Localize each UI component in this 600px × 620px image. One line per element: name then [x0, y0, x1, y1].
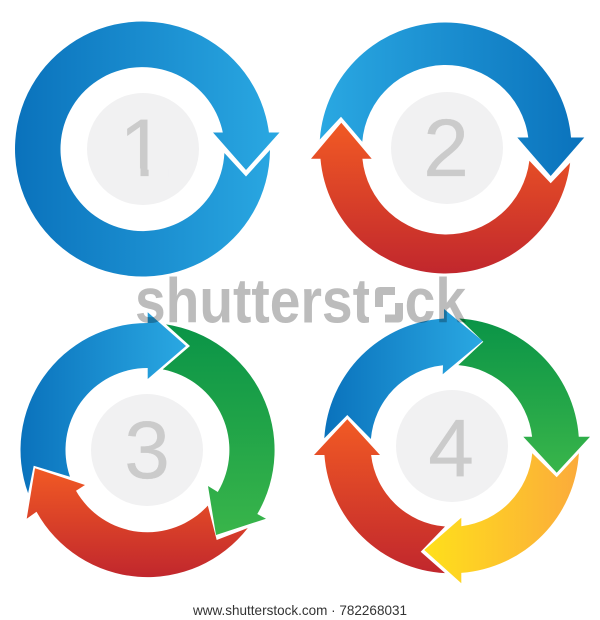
diagram 1: single-arrow cycle — [15, 22, 279, 277]
center badge 4 — [396, 390, 508, 502]
footer image id: www.shutterstock.com · 782268031 — [192, 602, 407, 618]
center badge 2: 2 — [423, 103, 469, 194]
center badge 2 — [391, 92, 503, 204]
arrow: blue top-left — [324, 309, 483, 439]
arrow: blue top — [320, 22, 584, 176]
arrow: green top-right — [458, 319, 590, 473]
arrow: red bottom-left — [314, 419, 445, 573]
center badge 4: 4 — [428, 403, 474, 494]
watermark wordmark: shutterstock — [135, 266, 467, 336]
center badge 3: 3 — [124, 405, 170, 496]
arrow: red bottom — [27, 468, 248, 577]
diagram 3: three-arrow cycle — [21, 312, 275, 577]
arrow: yellow bottom-right — [424, 453, 579, 583]
diagram 4: four-arrow cycle — [314, 309, 590, 583]
center badge 3 — [91, 394, 203, 506]
arrow: blue left — [21, 312, 186, 493]
diagram 2: two-arrow cycle — [311, 22, 584, 274]
center badge 1: 1 — [120, 103, 165, 194]
arrow: blue full ring — [15, 22, 279, 277]
arrow: red bottom — [311, 123, 570, 274]
center badge 1 — [87, 93, 199, 205]
arrow: green right — [163, 324, 275, 535]
